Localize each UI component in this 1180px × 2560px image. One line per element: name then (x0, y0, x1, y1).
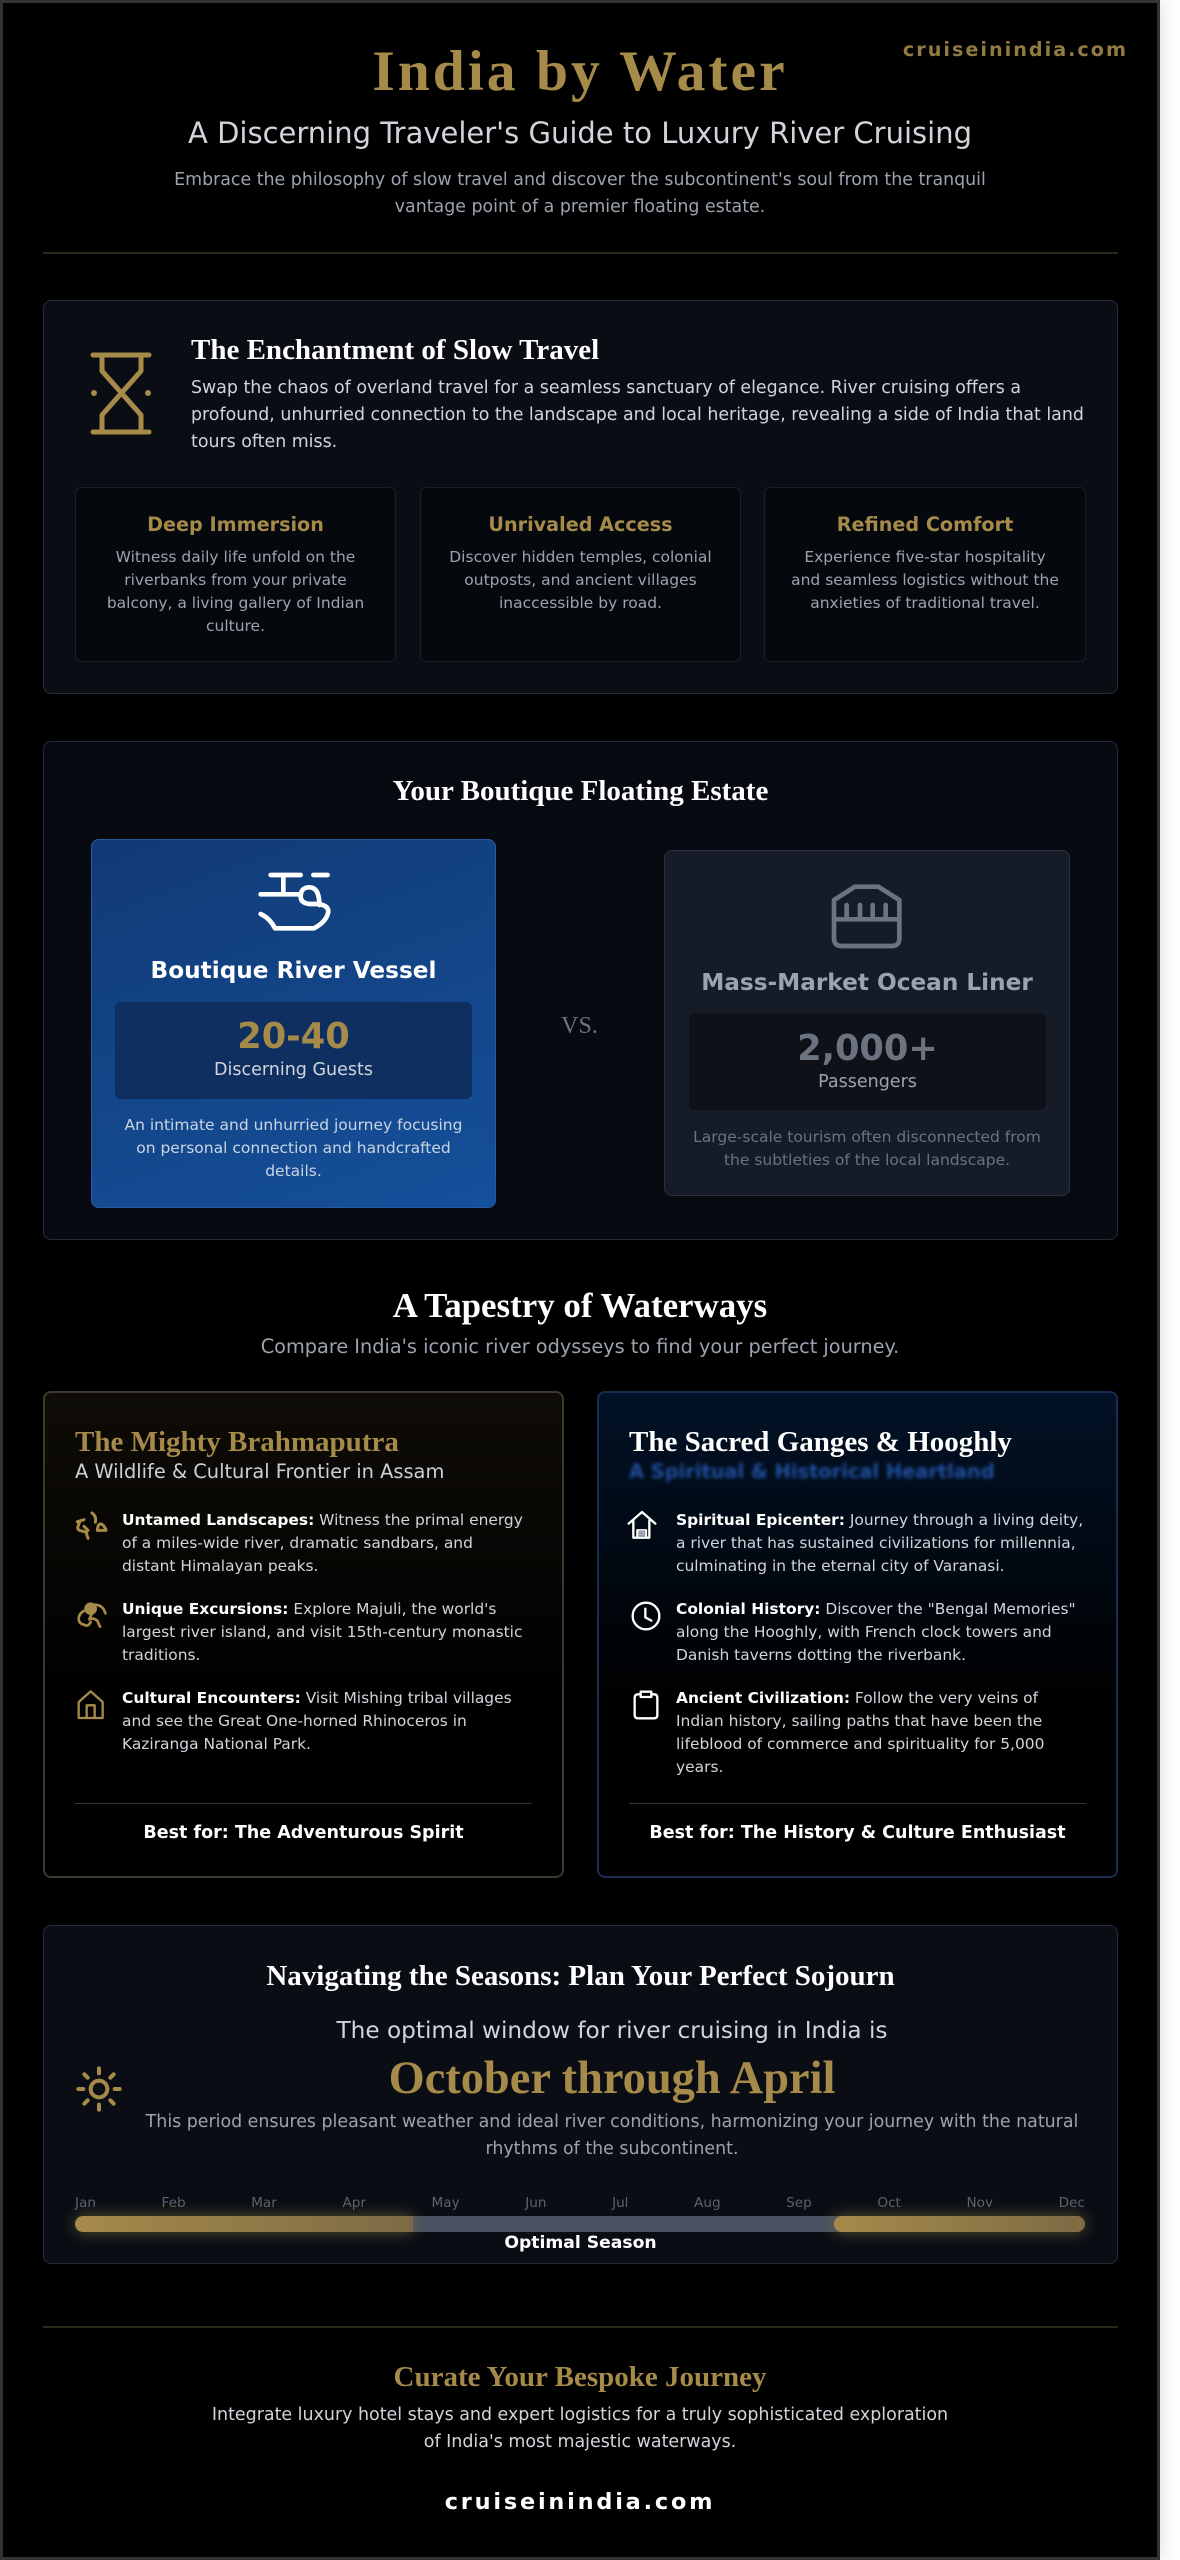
item text (676, 1688, 1044, 1776)
month labels: Dec (1059, 2195, 1085, 2211)
season description: rhythms of the subcontinent. (486, 2138, 738, 2158)
item: unique excursions (77, 1600, 522, 1664)
card text: Experience five-star hospitality (804, 548, 1046, 566)
footer text: of India's most majestic waterways. (424, 2432, 736, 2452)
website label: cruiseinindia.com (903, 38, 1128, 61)
card text: inaccessible by road. (499, 594, 662, 612)
card: unrivaled access (420, 487, 741, 662)
icon: temple house (627, 1510, 657, 1539)
item text: years. (676, 1758, 723, 1776)
river subtitle: A Wildlife & Cultural Frontier in Assam (75, 1460, 444, 1483)
heading: A Tapestry of Waterways (393, 1286, 767, 1325)
item: untamed landscapes (76, 1510, 523, 1575)
vessel description: details. (265, 1162, 322, 1180)
heading: Your Boutique Floating Estate (393, 775, 768, 807)
header (43, 38, 1128, 254)
item text: largest river island, and visit 15th-century monastic (122, 1623, 522, 1641)
body text: tours often miss. (191, 432, 337, 452)
bar: october to december (834, 2216, 1085, 2232)
card text (107, 548, 364, 634)
versus label: VS. (561, 1013, 598, 1039)
card text (449, 548, 712, 612)
card: boutique river vessel (91, 839, 496, 1208)
heading: Navigating the Seasons: Plan Your Perfect Sojourn (266, 1960, 895, 1992)
panel: boutique floating estate (43, 741, 1118, 1240)
card: deep immersion (75, 487, 396, 662)
item: ancient civilization (634, 1688, 1044, 1776)
month labels: Apr (342, 2195, 366, 2211)
item text: Ancient Civilization: Follow the very veins of (676, 1688, 1038, 1706)
card text: balcony, a living gallery of Indian (107, 594, 364, 612)
item text: and see the Great One-horned Rhinoceros in (122, 1712, 467, 1730)
item text: traditions. (122, 1646, 200, 1664)
footer text: Integrate luxury hotel stays and expert logistics for a truly sophisticated exploration (212, 2404, 948, 2424)
divider (629, 1803, 1086, 1804)
card text: and seamless logistics without the (791, 570, 1059, 588)
card text: Witness daily life unfold on the (116, 548, 355, 566)
stat label: Passengers (818, 1072, 917, 1092)
card text: outposts, and ancient villages (464, 570, 697, 588)
icon: house (78, 1690, 104, 1720)
icon: sun (76, 2066, 122, 2112)
month labels: Oct (877, 2195, 901, 2211)
card text: riverbanks from your private (124, 570, 347, 588)
item text: lifeblood of commerce and spirituality for 5,000 (676, 1735, 1044, 1753)
intro line: The optimal window for river cruising in India is (336, 2017, 888, 2044)
icon: hourglass (90, 352, 152, 434)
footer (43, 2326, 1118, 2515)
item text: along the Hooghly, with French clock towers and (676, 1623, 1052, 1641)
month labels: Jun (525, 2195, 546, 2211)
vessel description (124, 1116, 462, 1180)
footer text (212, 2404, 948, 2452)
item text: of a miles-wide river, dramatic sandbars, and (122, 1534, 473, 1552)
panel: ganges and hooghly (597, 1391, 1118, 1878)
section heading: waterways (261, 1286, 899, 1358)
panel: seasons (43, 1925, 1118, 2264)
item text: Cultural Encounters: Visit Mishing tribal villages (122, 1688, 512, 1706)
liner title: Mass-Market Ocean Liner (701, 968, 1033, 996)
header divider (43, 252, 1118, 254)
item text: Indian history, sailing paths that have been the (676, 1712, 1042, 1730)
footer website: cruiseinindia.com (445, 2489, 715, 2515)
bar: january to april (75, 2216, 413, 2232)
footer divider (43, 2326, 1118, 2328)
stat number: 20-40 (237, 1016, 350, 1057)
season description (146, 2112, 1078, 2158)
item: spiritual epicenter (627, 1510, 1083, 1575)
card text: culture. (206, 616, 265, 634)
river title: The Sacred Ganges & Hooghly (629, 1426, 1012, 1458)
bar caption: Optimal Season (504, 2232, 657, 2252)
icon: wildlife (76, 1511, 108, 1540)
item text: Danish taverns dotting the riverbank. (676, 1646, 966, 1664)
card text: anxieties of traditional travel. (810, 594, 1040, 612)
vessel description: on personal connection and handcrafted (136, 1138, 451, 1156)
month labels: Nov (966, 2195, 993, 2211)
card title: Unrivaled Access (488, 513, 673, 536)
card title: Deep Immersion (147, 513, 324, 536)
intro text: Embrace the philosophy of slow travel and discover the subcontinent's soul from the tranquil (174, 170, 986, 190)
subtitle: A Discerning Traveler's Guide to Luxury River Cruising (188, 116, 972, 150)
icon: island (77, 1602, 107, 1628)
card title: Refined Comfort (837, 513, 1013, 536)
title: India by Water (372, 40, 788, 103)
stat number: 2,000+ (797, 1028, 938, 1069)
heading: The Enchantment of Slow Travel (191, 334, 599, 366)
stat box (689, 1013, 1046, 1110)
month labels: Sep (786, 2195, 812, 2211)
month labels: May (432, 2195, 460, 2211)
panel: slow travel (43, 300, 1118, 694)
item text: Unique Excursions: Explore Majuli, the world's (122, 1600, 496, 1618)
body text: profound, unhurried connection to the landscape and local heritage, revealing a side of India that land (191, 405, 1084, 425)
item text: Kaziranga National Park. (122, 1735, 311, 1753)
card: ocean liner (664, 850, 1070, 1196)
item text (122, 1510, 523, 1575)
liner description: Large-scale tourism often disconnected from (693, 1128, 1041, 1146)
season highlight: October through April (389, 2052, 835, 2104)
icon: ocean liner (832, 884, 902, 948)
intro text: vantage point of a premier floating estate. (395, 197, 765, 217)
item text (122, 1688, 512, 1753)
item text (676, 1600, 1076, 1664)
intro text (174, 170, 986, 217)
season bar (75, 2216, 1085, 2232)
item text (676, 1510, 1083, 1575)
best for: Best for: The History & Culture Enthusiast (649, 1823, 1066, 1843)
icon: clipboard (634, 1690, 658, 1720)
card text (791, 548, 1059, 612)
icon: clock (632, 1602, 660, 1630)
body text: Swap the chaos of overland travel for a seamless sanctuary of elegance. River cruising offers a (191, 378, 1021, 398)
item text: distant Himalayan peaks. (122, 1557, 318, 1575)
liner description (693, 1128, 1041, 1168)
liner description: the subtleties of the local landscape. (724, 1150, 1010, 1168)
item: cultural encounters (78, 1688, 512, 1753)
body text (191, 378, 1084, 452)
divider (75, 1803, 532, 1804)
month labels: Feb (162, 2195, 186, 2211)
stat label: Discerning Guests (214, 1060, 373, 1080)
icon: river boat (258, 872, 331, 931)
month labels: Jan (75, 2195, 96, 2211)
river title: The Mighty Brahmaputra (75, 1426, 399, 1458)
month labels (74, 2195, 1085, 2211)
item: colonial history (632, 1600, 1076, 1664)
item text: Spiritual Epicenter: Journey through a living deity, (676, 1510, 1083, 1528)
stat box (115, 1002, 472, 1099)
card: refined comfort (764, 487, 1086, 662)
season description: This period ensures pleasant weather and ideal river conditions, harmonizing your journey with the natural (146, 2112, 1078, 2132)
river subtitle: A Spiritual & Historical Heartland (629, 1460, 995, 1483)
item text (122, 1600, 522, 1664)
card text: Discover hidden temples, colonial (449, 548, 712, 566)
vessel title: Boutique River Vessel (151, 956, 436, 984)
subheading: Compare India's iconic river odysseys to find your perfect journey. (261, 1335, 899, 1358)
month labels: Jul (612, 2195, 628, 2211)
month labels: Aug (694, 2195, 721, 2211)
month labels: Mar (251, 2195, 277, 2211)
item text: Untamed Landscapes: Witness the primal energy (122, 1510, 523, 1528)
vessel description: An intimate and unhurried journey focusing (124, 1116, 462, 1134)
item text: culminating in the eternal city of Varanasi. (676, 1557, 1005, 1575)
item text: Colonial History: Discover the "Bengal Memories" (676, 1600, 1076, 1618)
item text: a river that has sustained civilizations for millennia, (676, 1534, 1076, 1552)
best for: Best for: The Adventurous Spirit (143, 1823, 464, 1843)
footer heading: Curate Your Bespoke Journey (394, 2361, 766, 2393)
panel: brahmaputra (43, 1391, 564, 1878)
